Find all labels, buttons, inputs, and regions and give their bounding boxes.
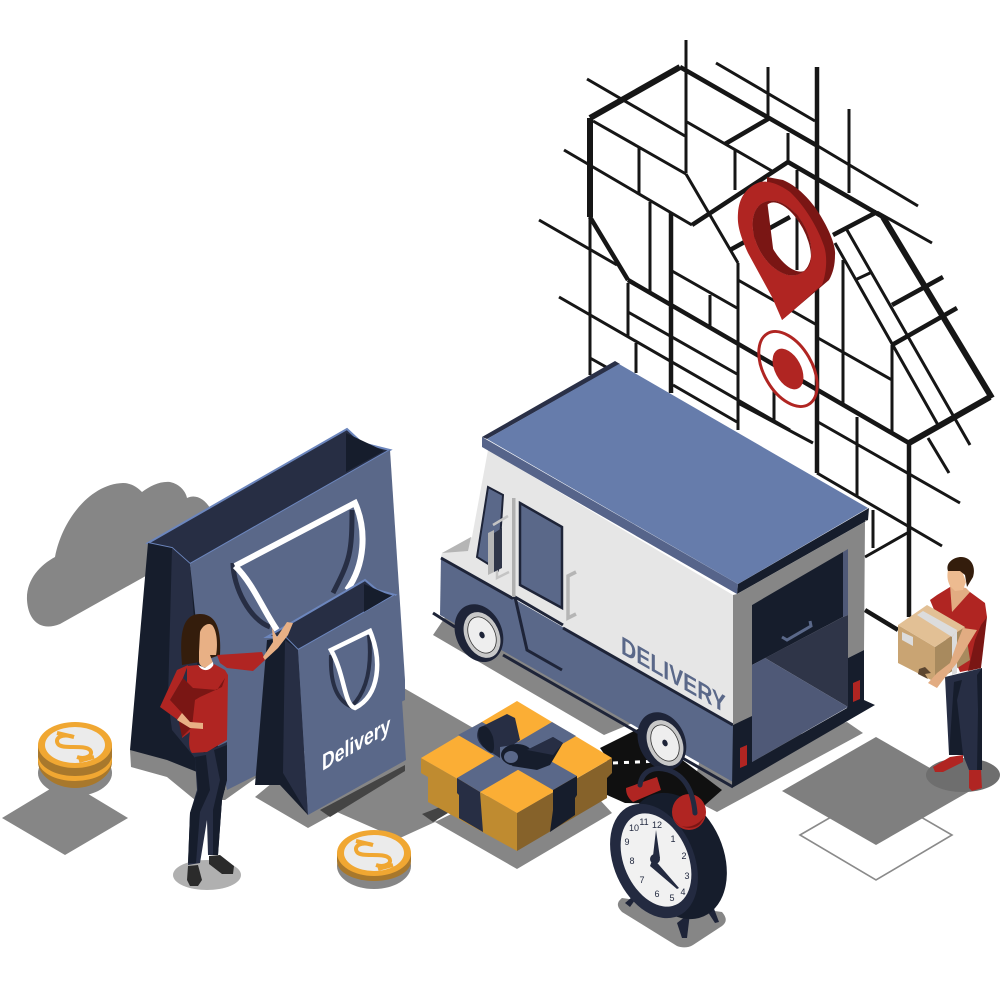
parcel tape top <box>917 611 957 637</box>
cargo door side strip <box>843 549 848 617</box>
door window <box>520 503 562 608</box>
loading zone diamond <box>782 737 970 845</box>
hood shade <box>442 537 471 553</box>
clock numerals <box>624 817 690 903</box>
cargo floor <box>752 658 848 762</box>
roof top <box>487 364 868 584</box>
large bag inner side <box>346 433 384 472</box>
right bell shade <box>673 816 705 828</box>
van lower body <box>440 557 733 782</box>
woman leg shading <box>188 745 227 863</box>
ribbon left face <box>457 778 483 832</box>
tail light right <box>853 680 860 702</box>
bow loop right highlight <box>527 737 563 755</box>
small bag inner <box>267 580 395 650</box>
shadow under small bag <box>320 765 405 817</box>
large bag fold <box>168 548 205 770</box>
bow knot <box>501 744 533 766</box>
delivery van <box>433 361 875 788</box>
small white handle <box>331 631 377 708</box>
parcel top <box>898 605 965 647</box>
parcel icon <box>918 667 931 679</box>
rear hub <box>645 720 685 766</box>
large handle shadow <box>233 510 352 627</box>
pin back edge <box>753 177 835 320</box>
small handle shadow <box>331 635 370 707</box>
front wheel <box>445 596 512 670</box>
map target marker <box>747 321 829 417</box>
numeral 8: 8 <box>629 856 635 866</box>
small bag fold <box>283 640 308 815</box>
tail light left <box>740 745 747 768</box>
rear hub bolt <box>661 739 669 747</box>
gift top <box>421 701 612 813</box>
black shadow under van rear <box>600 728 722 805</box>
woman neck and face <box>199 624 217 668</box>
roof front edge <box>482 437 738 594</box>
body trim lines <box>433 558 733 787</box>
numeral 12: 12 <box>652 820 662 830</box>
rear tyre rim <box>639 714 691 772</box>
front hub bolt <box>478 631 486 639</box>
right bell <box>672 794 706 830</box>
clock ground shadow <box>618 898 726 947</box>
woman hair <box>181 614 220 665</box>
man foot shadow <box>926 758 1000 792</box>
map location pin <box>738 177 835 320</box>
side mirror <box>488 516 509 578</box>
van ground shadow right <box>690 722 863 812</box>
gift ground shadow <box>435 790 612 869</box>
man legs <box>945 668 982 770</box>
bow knot hole <box>504 751 518 763</box>
rear wheel <box>628 704 695 778</box>
coin side <box>337 853 411 881</box>
loading zone diamond outline <box>800 791 952 880</box>
gift right side <box>517 758 612 851</box>
cargo door handle <box>782 621 811 640</box>
coin rim <box>337 830 411 876</box>
parcel tape side <box>952 630 957 675</box>
numeral 10: 10 <box>629 823 639 833</box>
large bag front <box>190 450 405 790</box>
bag Delivery label: Delivery <box>322 710 391 776</box>
gift left side <box>421 758 517 851</box>
bow loop left <box>477 714 520 758</box>
large bag side panel <box>130 543 225 790</box>
upper coin side <box>38 745 112 776</box>
numeral 7: 7 <box>639 875 645 885</box>
mirror frame <box>488 530 494 575</box>
mirror arm <box>493 516 509 578</box>
windshield <box>477 487 503 570</box>
target ring <box>747 321 829 417</box>
dashed road line <box>613 761 660 763</box>
numeral 4: 4 <box>680 887 686 897</box>
ribbon band one <box>458 722 577 790</box>
parcel left face <box>898 625 935 682</box>
bow loop shade <box>478 726 494 753</box>
clock front foot <box>677 913 690 938</box>
cargo wall <box>765 615 848 707</box>
mirror glass <box>494 528 502 572</box>
woman torso <box>182 664 228 753</box>
parcel label <box>902 632 913 646</box>
darker contact shadows <box>320 765 448 822</box>
clock body <box>608 777 746 935</box>
single coin <box>337 830 411 889</box>
left bell <box>626 777 661 802</box>
front wheel arch <box>445 596 512 670</box>
large bag inner back <box>148 429 390 564</box>
man right shoe <box>969 770 982 791</box>
alarm clock <box>593 769 746 938</box>
numeral 2: 2 <box>681 851 687 861</box>
clock hands <box>650 830 679 889</box>
small shopping bag <box>255 580 406 815</box>
ground shadows <box>2 482 863 947</box>
bow loop right <box>512 737 563 770</box>
man arm and hand <box>928 628 977 688</box>
man leg shading <box>949 668 982 770</box>
van ground shadow left <box>433 610 640 735</box>
clock front ring <box>593 790 715 932</box>
man face <box>947 570 966 591</box>
roof rear edge <box>737 508 869 594</box>
big bag ground shadow <box>130 750 260 800</box>
front tyre rim <box>456 606 508 664</box>
clock face <box>607 802 705 918</box>
city street map <box>539 40 992 630</box>
rear lower bumper <box>732 650 875 788</box>
small bag side <box>255 637 308 815</box>
woman hip hand <box>177 713 203 729</box>
stacked coins <box>38 722 112 796</box>
target dot <box>766 343 810 395</box>
clock right foot <box>702 898 719 923</box>
woman collar <box>198 662 214 675</box>
woman raised sleeve <box>217 652 265 671</box>
man neck <box>950 585 970 612</box>
lower coin side <box>38 752 112 788</box>
numeral 9: 9 <box>624 837 630 847</box>
bags and gift ground shadow <box>255 687 490 838</box>
woman legs <box>188 742 227 865</box>
numeral 11: 11 <box>639 817 649 827</box>
ribbon right face <box>550 776 577 832</box>
small bag front <box>298 595 406 815</box>
cloud shadow <box>27 482 210 627</box>
small bag inner side <box>364 584 391 612</box>
rear grey frame <box>733 520 868 725</box>
woman figure <box>160 614 293 886</box>
front hub <box>462 612 502 658</box>
man left shoe <box>933 755 963 772</box>
upper coin face <box>45 727 105 763</box>
large shopping bag <box>130 429 405 790</box>
woman bust and side shade <box>170 678 225 737</box>
parcel right face <box>935 627 970 682</box>
door handle <box>568 572 576 618</box>
pin front <box>738 182 826 320</box>
van white side <box>441 450 733 725</box>
clock hub <box>650 854 660 864</box>
clock back foot <box>625 892 638 907</box>
shadow by gift <box>422 807 448 822</box>
clock handle <box>640 769 695 813</box>
coin diamond shadow <box>2 780 128 855</box>
gift box <box>421 701 612 851</box>
coin dollar symbol <box>356 841 393 869</box>
numeral 5: 5 <box>669 893 675 903</box>
roof dark left edge <box>482 361 620 439</box>
lower coin top <box>38 739 112 781</box>
man shirt shade <box>968 617 987 671</box>
pin inner hole shading <box>753 201 811 275</box>
raised cargo door <box>752 552 843 665</box>
woman shoes <box>187 855 234 886</box>
DELIVERY side lettering: DELIVERY <box>621 631 726 720</box>
woman raised forearm <box>263 622 293 660</box>
woman foot shadow <box>173 860 241 890</box>
numeral 3: 3 <box>684 871 690 881</box>
ribbon band two <box>457 722 576 792</box>
dollar symbol <box>57 733 94 761</box>
man hair <box>947 557 974 587</box>
stack shadow <box>38 750 112 796</box>
coin face <box>344 835 404 871</box>
upper coin rim <box>38 722 112 768</box>
numeral 6: 6 <box>654 889 660 899</box>
large white handle <box>235 503 363 630</box>
man shirt <box>930 587 987 672</box>
door pillar <box>512 498 516 597</box>
coin shadow <box>337 843 411 889</box>
numeral 1: 1 <box>670 834 676 844</box>
woman left arm <box>160 665 188 720</box>
delivery man figure <box>898 557 987 791</box>
rear wheel arch <box>628 704 695 778</box>
